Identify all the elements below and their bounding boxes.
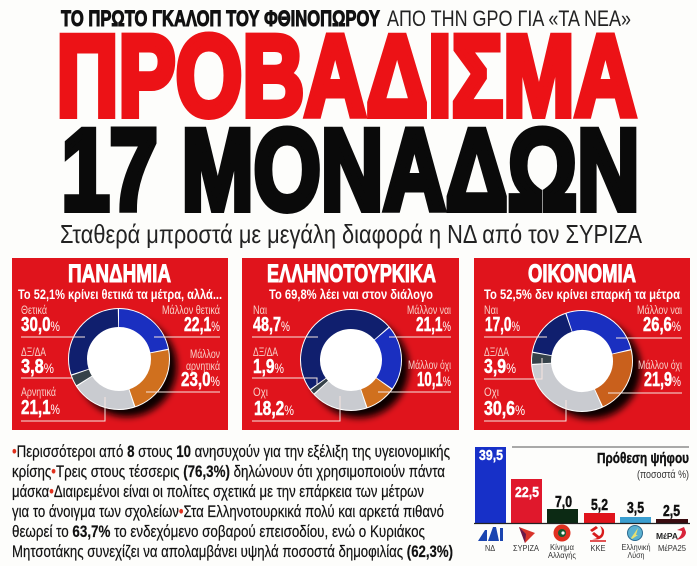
chart heading — [512, 447, 689, 481]
text block: key findings: για το άνοιγμα των σχολείων•Στα Ελληνοτουρκικά πολύ και αρκετά πιθανό — [12, 503, 444, 521]
label: no answer: ΔΞ/ΔΑ — [253, 345, 278, 359]
party: Elliniki Lysi: Λύση — [628, 550, 645, 560]
bar: ND: 39,5 — [479, 447, 503, 464]
label: yes: Ναι — [253, 303, 267, 317]
panel title: ΕΛΛΗΝΟΤΟΥΡΚΙΚΑ — [267, 260, 436, 288]
label: rather no: Μάλλον όχι — [638, 358, 682, 372]
party: MeRA25 — [656, 527, 686, 553]
party: ND — [478, 527, 503, 553]
bar: SYRIZA — [511, 479, 542, 523]
donut chart — [68, 308, 177, 417]
label: no answer — [484, 345, 542, 379]
label: rather no: Μάλλον όχι — [408, 358, 451, 372]
label: no answer — [252, 345, 317, 385]
label: yes — [484, 303, 547, 337]
label: no: 30,6% — [484, 398, 525, 420]
bar chart: vote intention — [474, 447, 690, 560]
text block: key findings: Μητσοτάκης συνεχίζει να απολαμβάνει υψηλά ποσοστά δημοφιλίας (62,3%) — [12, 543, 453, 561]
kicker line: ΤΟ ΠΡΩΤΟ ΓΚΑΛΟΠ ΤΟΥ ΦΘΙΝΟΠΩΡΟΥ — [61, 6, 380, 31]
label: rather yes: 21,1% — [416, 314, 451, 336]
panel: pandemic — [12, 258, 228, 430]
party: MeRA25: ΜέΡΑ25 — [658, 543, 686, 553]
label: yes — [252, 303, 318, 337]
bar: Elliniki Lysi: 3,5 — [627, 500, 644, 517]
label: no — [252, 385, 340, 421]
label: rather yes — [389, 303, 451, 337]
label: rather positive — [154, 303, 220, 337]
label: negative: 21,1% — [21, 397, 60, 419]
label: rather negative: 23,0% — [181, 369, 220, 391]
bar: ND — [475, 447, 506, 523]
label: positive: Θετικά — [21, 303, 47, 317]
text block: key findings: •Περισσότεροι από 8 στους 10 ανησυχούν για την εξέλιξη της υγειονομικής — [12, 443, 450, 461]
label: no answer: 1,9% — [253, 356, 284, 378]
label: no answer: 3,9% — [484, 356, 516, 378]
party: KINAL — [548, 524, 576, 560]
label: rather yes: 26,6% — [643, 314, 681, 336]
kicker line: ΑΠΟ ΤΗΝ GPO ΓΙΑ «ΤΑ ΝΕΑ» — [387, 6, 631, 31]
panel title: ΟΙΚΟΝΟΜΙΑ — [528, 260, 636, 288]
panel: economy — [474, 258, 690, 430]
label: rather positive: 22,1% — [184, 314, 220, 336]
donut chart — [294, 303, 409, 418]
label: no: Οχι — [484, 385, 499, 399]
label: negative: Αρνητικά — [21, 385, 56, 399]
label: rather no: 21,9% — [644, 369, 681, 391]
panel subtitle: Το 52,1% κρίνει θετικά τα μέτρα, αλλά... — [18, 286, 222, 302]
label: no: 18,2% — [254, 398, 294, 420]
label: rather no — [378, 358, 451, 392]
bar: KINAL: 7,0 — [555, 494, 572, 511]
text block: key findings: θεωρεί το 63,7% το ενδεχόμενο σοβαρού επεισοδίου, ενώ ο Κυριάκος — [12, 523, 425, 541]
party: SYRIZA: ΣΥΡΙΖΑ — [513, 543, 539, 553]
text block: key findings: κρίσης•Τρεις στους τέσσερις (76,3%) δηλώνουν ότι χρησιμοποιούν πάντα — [12, 463, 445, 481]
text block: key findings: μάσκα•Διαιρεμένοι είναι οι πολίτες σχετικά με την επάρκεια των μέτρων — [12, 483, 424, 501]
panel subtitle: Το 69,8% λέει ναι στον διάλογο — [269, 286, 433, 302]
party: MeRA25: ΜέΡΑ — [656, 532, 678, 541]
label: rather negative: αρνητικά — [186, 359, 220, 373]
label: rather yes: Μάλλον ναι — [407, 303, 451, 317]
label: yes: 48,7% — [253, 314, 290, 336]
label: rather yes: Μάλλον ναι — [637, 303, 682, 317]
party: KINAL: Κίνημα — [550, 542, 574, 552]
party: SYRIZA — [513, 527, 539, 553]
bar: Elliniki Lysi — [620, 500, 651, 523]
panel: greek-turkish relations — [242, 258, 459, 430]
bar: MeRA25 — [656, 503, 688, 523]
label: positive: 30,0% — [21, 314, 60, 336]
bar: MeRA25: 2,5 — [663, 503, 680, 520]
label: negative — [21, 385, 105, 421]
label: no answer: 3,8% — [21, 356, 54, 378]
label: no answer — [21, 345, 73, 378]
party: KKE — [590, 526, 606, 553]
party: Elliniki Lysi — [622, 526, 651, 560]
label: rather no — [608, 358, 682, 393]
label: no answer: ΔΞ/ΔΑ — [21, 345, 46, 359]
label: rather negative — [146, 347, 220, 392]
party: KKE: ΚΚΕ — [590, 543, 606, 553]
text block: key findings — [12, 443, 453, 561]
party: Elliniki Lysi: Ελληνική — [622, 542, 651, 552]
label: positive — [21, 303, 85, 337]
bar: KINAL — [547, 494, 578, 523]
label: no answer: ΔΞ/ΔΑ — [484, 345, 509, 359]
label: rather yes — [616, 303, 682, 338]
panel title: ΠΑΝΔΗΜΙΑ — [68, 260, 171, 288]
party: KINAL: Αλλαγής — [548, 550, 576, 560]
donut chart — [531, 310, 641, 419]
label: rather no: 10,1% — [417, 369, 451, 391]
bar: KKE — [584, 497, 615, 523]
party: ND: ΝΔ — [485, 543, 495, 553]
bar: SYRIZA: 22,5 — [515, 484, 539, 501]
label: no — [484, 385, 566, 421]
label: no: Οχι — [253, 385, 268, 399]
label: rather negative: Μάλλον — [190, 347, 220, 361]
label: yes: 17,0% — [485, 314, 520, 336]
label: rather positive: Μάλλον θετικά — [162, 303, 220, 317]
label: yes: Ναι — [484, 303, 498, 317]
bar: KKE: 5,2 — [591, 497, 608, 514]
